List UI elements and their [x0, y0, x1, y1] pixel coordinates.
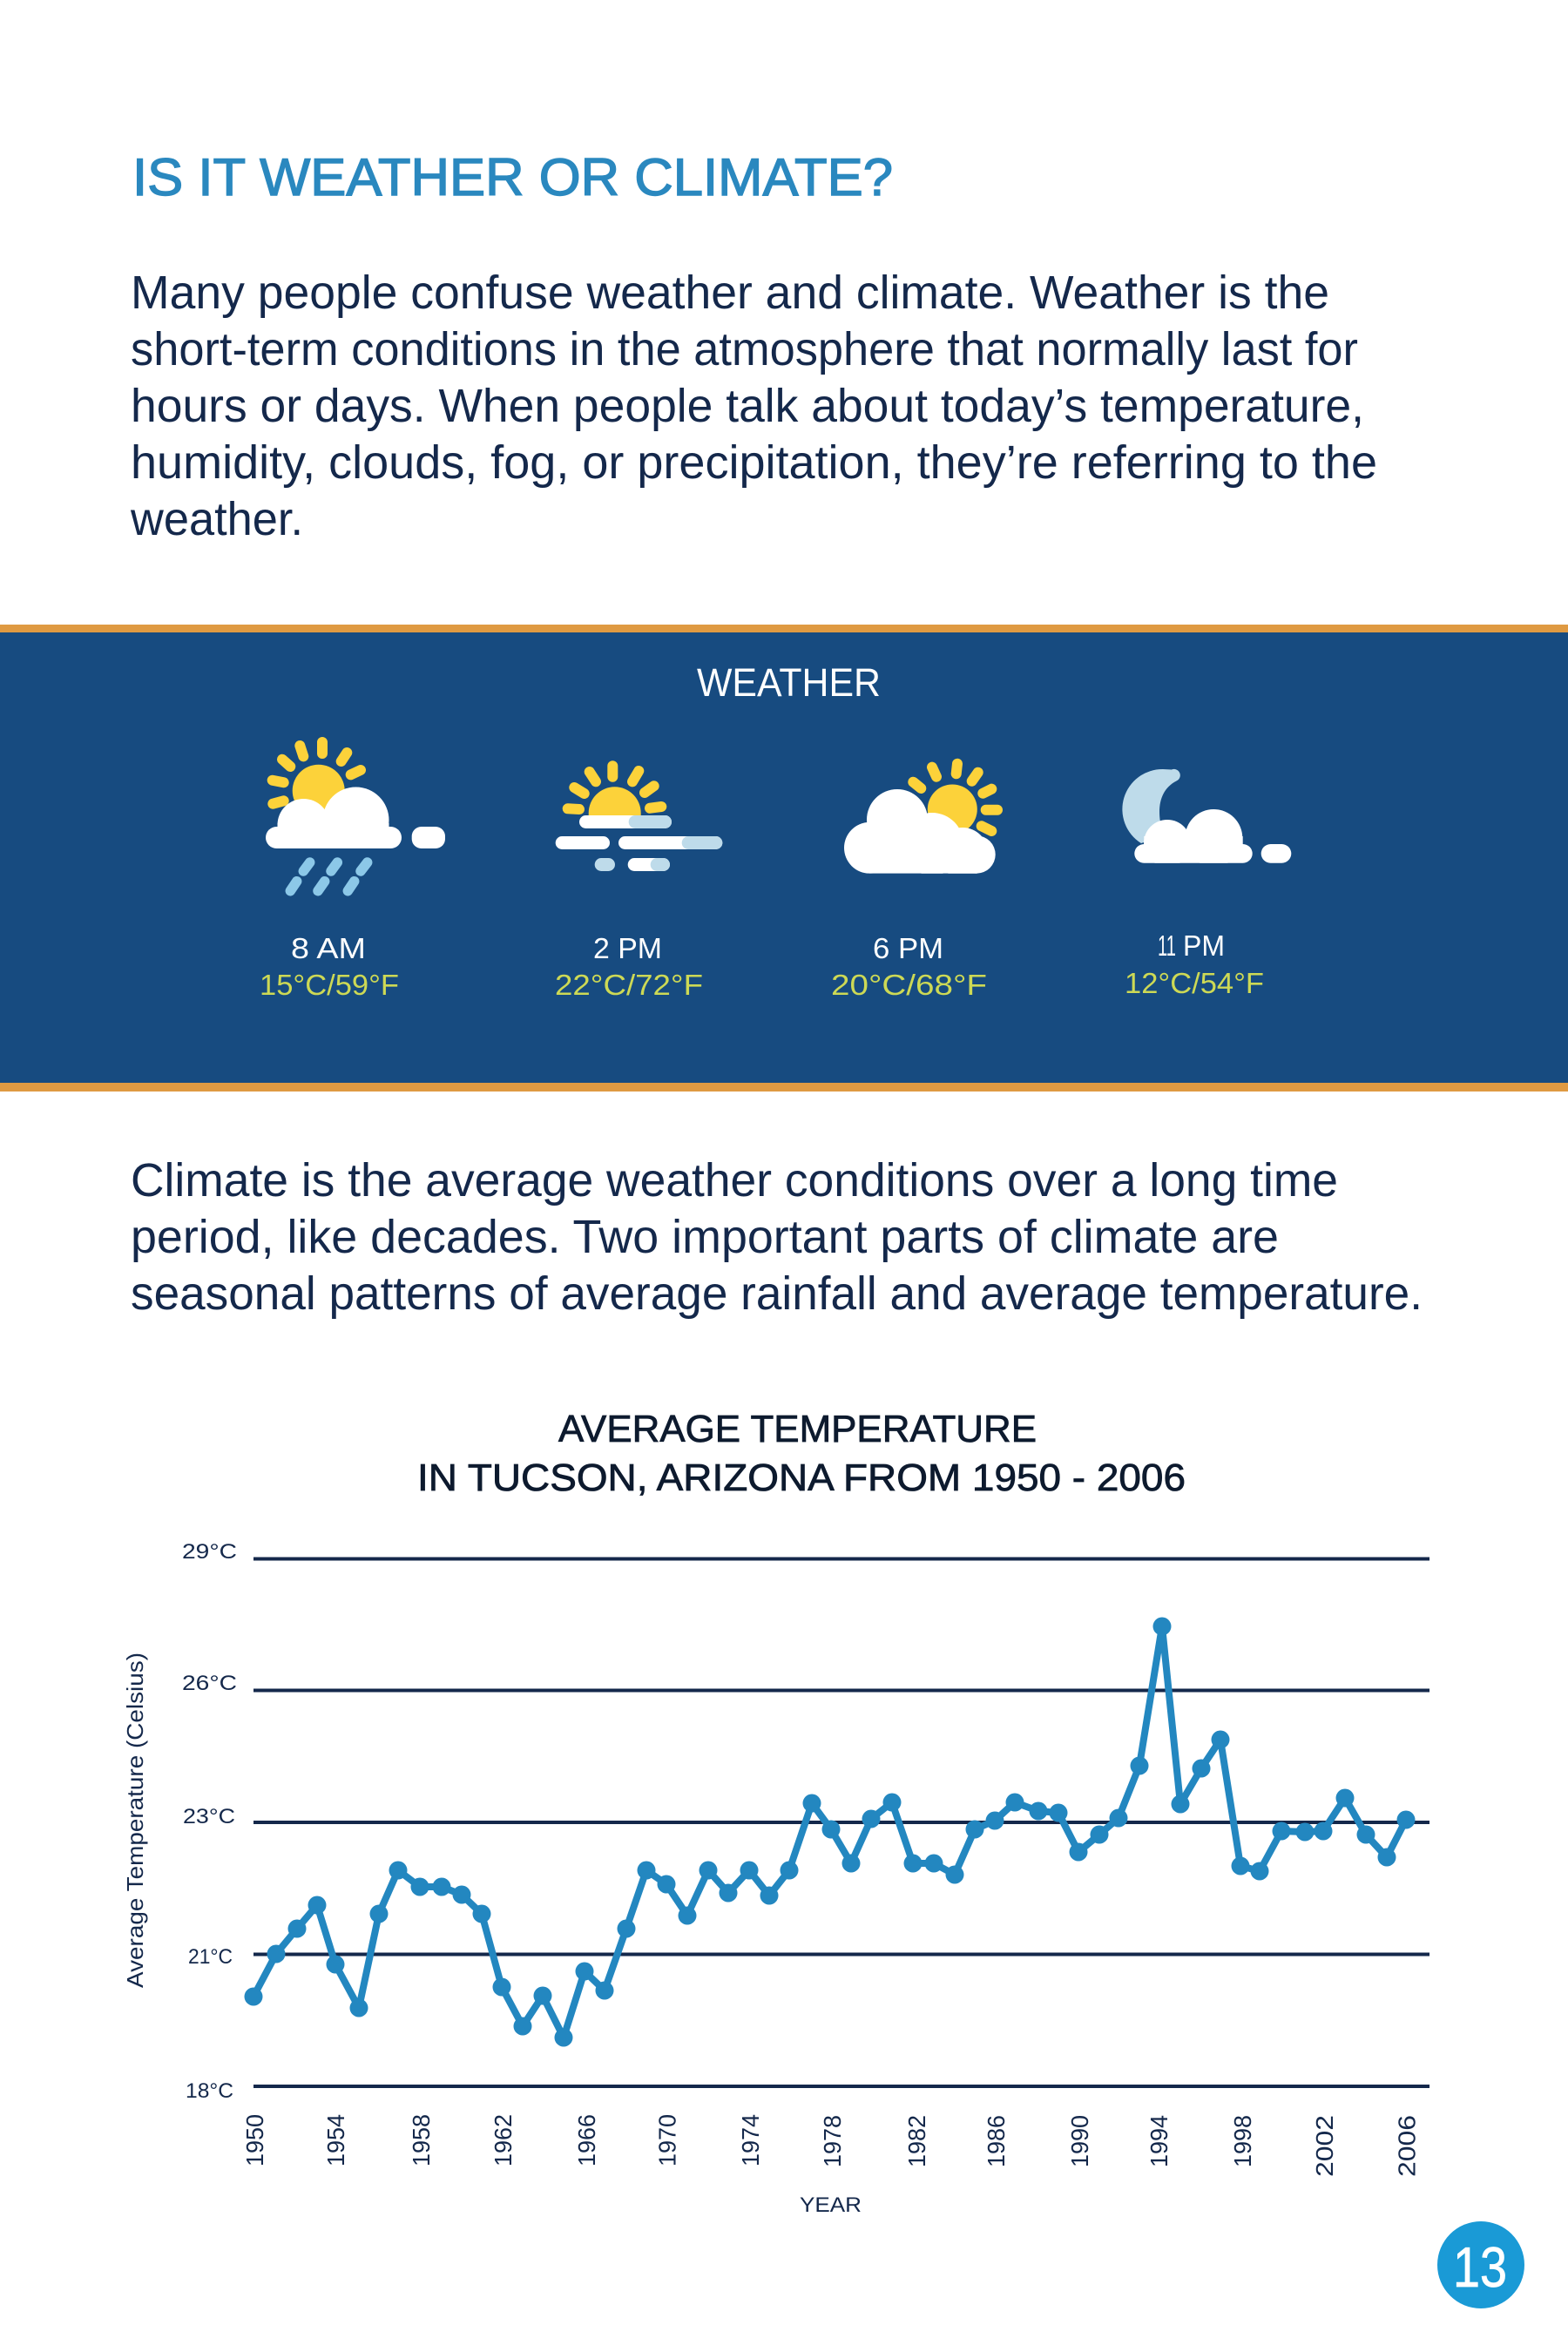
gridlines [253, 1559, 1429, 2086]
y axis labels: 21°C [188, 1945, 233, 1969]
y axis labels: 23°C [183, 1805, 235, 1828]
chart title [417, 1408, 1186, 1499]
icon: sun behind cloud [844, 764, 997, 878]
x axis year labels: 1982 [903, 2115, 930, 2167]
label: 2 PM [555, 932, 703, 1001]
icon: moon and cloud [1122, 769, 1291, 867]
page number badge [1437, 2221, 1524, 2308]
y axis labels [182, 1540, 237, 2103]
y axis title: Average Temperature (Celsius) [122, 1652, 148, 1988]
y axis labels: 26°C [182, 1672, 237, 1695]
title: IS IT WEATHER OR CLIMATE? [132, 148, 893, 206]
x axis year labels: 1966 [573, 2114, 600, 2166]
label: 2 PM: 22°C/72°F [555, 969, 703, 1001]
label: 11 PM: PM [1183, 929, 1225, 962]
text block: climate definition [131, 1154, 1423, 1320]
text block: weather definition: Many people confuse weather and climate. Weather is the [131, 267, 1329, 319]
x axis year labels: 1950 [241, 2114, 268, 2166]
x axis year labels: 1994 [1146, 2115, 1173, 2167]
text block: weather definition: weather. [130, 493, 303, 545]
label: 11 PM: 12°C/54°F [1125, 967, 1264, 999]
line chart: average temperature [122, 1540, 1429, 2217]
text block: climate definition: Climate is the average weather conditions over a long time [131, 1154, 1338, 1206]
label: 6 PM: 20°C/68°F [831, 969, 987, 1001]
x axis year labels: 1954 [322, 2114, 349, 2166]
text block: weather definition: humidity, clouds, fog, or precipitation, they’re referring to the [131, 436, 1377, 489]
label: 8 AM: 15°C/59°F [260, 969, 399, 1001]
chart title: IN TUCSON, ARIZONA FROM 1950 - 2006 [417, 1456, 1186, 1499]
panel: weather banner [0, 625, 1568, 1092]
y axis labels: 18°C [186, 2079, 233, 2103]
text block: weather definition [130, 267, 1377, 545]
x axis year labels: 1962 [490, 2114, 517, 2166]
x axis year labels: 2006 [1394, 2115, 1420, 2177]
x axis year labels [241, 2114, 1420, 2177]
text block: weather definition: short-term conditions in the atmosphere that normally last for [131, 323, 1358, 375]
icon: sun and fog [556, 766, 722, 871]
x axis title: YEAR [800, 2193, 862, 2217]
x axis year labels: 1990 [1066, 2115, 1093, 2167]
text block: climate definition: seasonal patterns of average rainfall and average temperature. [131, 1267, 1423, 1320]
page number badge: 13 [1453, 2235, 1507, 2299]
data points [244, 1617, 1415, 2047]
x axis year labels: 1970 [653, 2114, 681, 2166]
x axis year labels: 1978 [819, 2115, 846, 2167]
icon: sun, cloud and rain [266, 742, 445, 891]
y axis labels: 29°C [182, 1540, 237, 1564]
x axis year labels: 2002 [1311, 2115, 1338, 2177]
panel heading: WEATHER [697, 660, 881, 705]
label: 2 PM: 2 PM [593, 932, 662, 964]
label: 8 AM: 8 AM [291, 932, 366, 964]
label: 6 PM: 6 PM [873, 932, 943, 964]
temperature line [253, 1626, 1406, 2038]
label: 11 PM [1125, 929, 1264, 999]
label: 11 PM: 11 [1158, 929, 1176, 962]
label: 8 AM [260, 932, 399, 1001]
x axis year labels: 1986 [983, 2115, 1010, 2167]
text block: climate definition: period, like decades. Two important parts of climate are [131, 1211, 1279, 1263]
x axis year labels: 1958 [408, 2114, 435, 2166]
chart title: AVERAGE TEMPERATURE [558, 1408, 1037, 1450]
x axis year labels: 1974 [737, 2114, 764, 2166]
text block: weather definition: hours or days. When people talk about today’s temperature, [131, 380, 1364, 432]
x axis year labels: 1998 [1229, 2115, 1256, 2167]
label: 6 PM [831, 932, 987, 1001]
